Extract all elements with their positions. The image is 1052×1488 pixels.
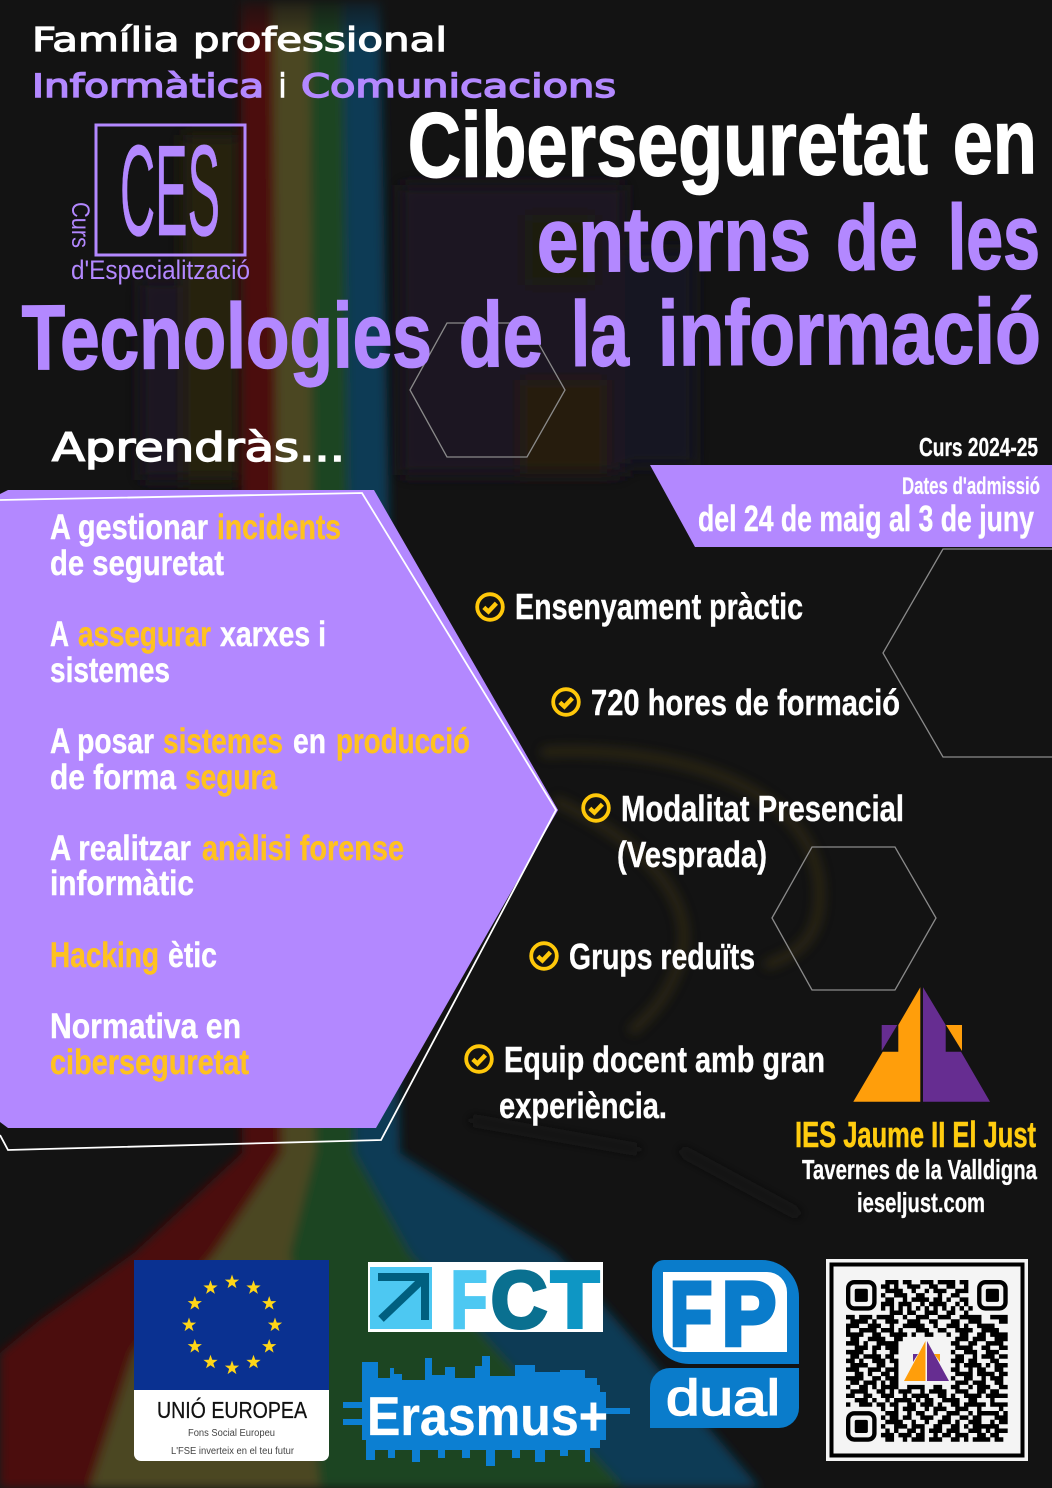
- outcome: xarxes: assegurar: [78, 615, 211, 654]
- outcome: producció: en: [293, 722, 326, 761]
- logo: European Union flag: Fons Social Europeu: [188, 1428, 275, 1439]
- outcome: producció: sistemes: [163, 722, 283, 761]
- title line 2: [536, 186, 1040, 292]
- feature: grups: [531, 936, 755, 977]
- outcome: forense: anàlisi forense: [202, 829, 404, 868]
- decorative hexagon outlines: [410, 323, 1052, 990]
- logo: FCT: T: [551, 1255, 599, 1344]
- heading: Família professional: Família professional: [32, 20, 447, 59]
- outcome: producció: de forma: [50, 758, 176, 797]
- main title: [21, 91, 1041, 389]
- outcome: producció: A posar: [50, 722, 154, 761]
- title line 1: Ciberseguretat: [407, 92, 928, 197]
- outcome: hacking: Hacking: [50, 936, 159, 975]
- title line 3: [21, 281, 1041, 389]
- logo: CES Curs d'Especialització: [66, 119, 250, 285]
- school name and address: [795, 1114, 1037, 1218]
- feature: modalitat: Modalitat Presencial: [621, 788, 904, 829]
- outcome: incidents: de seguretat: [50, 544, 224, 583]
- heading: Informàtica i Comunicacions: i: [279, 67, 286, 105]
- logo: FP dual: F: [670, 1265, 712, 1365]
- outcome: incidents: A gestionar: [50, 508, 208, 547]
- feature: equip docent: Equip docent amb gran: [504, 1039, 825, 1080]
- feature: hores: 720 hores de formació: [591, 682, 900, 723]
- QR code: [826, 1259, 1028, 1461]
- logo: FCT: C: [491, 1255, 547, 1344]
- outcome: xarxes: xarxes i: [220, 615, 326, 654]
- outcome: xarxes: sistemes: [50, 651, 170, 690]
- logo: FCT: F: [451, 1255, 487, 1344]
- outcome: forense: informàtic: [50, 864, 194, 903]
- outcome: xarxes: A: [50, 615, 69, 654]
- logo: IES Jaume II pyramid: [853, 987, 990, 1102]
- feature: ensenyament: Ensenyament pràctic: [515, 586, 803, 627]
- heading: Informàtica i Comunicacions: Informàtica: [32, 67, 264, 105]
- heading: Família professional: [32, 20, 616, 105]
- logo: European Union flag: UNIÓ EUROPEA: [157, 1397, 308, 1423]
- panel: learning outcomes: [0, 490, 558, 1150]
- logo: FP dual: [650, 1260, 799, 1428]
- title line 3: la: [570, 283, 630, 386]
- outcome: producció: producció: [336, 722, 470, 761]
- outcome: incidents: [50, 508, 341, 583]
- school name and address: ieseljust.com: [857, 1187, 985, 1218]
- outcome: forense: [50, 829, 404, 903]
- title line 3: de: [458, 284, 543, 386]
- outcome: incidents: incidents: [217, 508, 341, 547]
- title line 2: de: [835, 187, 918, 290]
- outcome: normativa: ciberseguretat: [50, 1043, 249, 1082]
- logo: European Union flag: L'FSE inverteix en el teu futur: [171, 1446, 295, 1457]
- outcome: forense: A realitzar: [50, 829, 191, 868]
- feature: equip docent: [466, 1039, 825, 1126]
- logo: CES Curs d'Especialització: d'Especialització: [71, 255, 250, 285]
- outcome: normativa: [50, 1007, 249, 1082]
- feature: equip docent: experiència.: [499, 1085, 667, 1126]
- logo: Erasmus+: [343, 1356, 630, 1466]
- outcome: producció: [50, 722, 470, 797]
- logo: FCT: [368, 1255, 603, 1344]
- title line 2: entorns: [536, 188, 811, 292]
- outcome: normativa: Normativa en: [50, 1007, 241, 1046]
- banner: admission dates: [650, 465, 1052, 547]
- feature: modalitat: [583, 788, 904, 875]
- heading: Aprendràs: Aprendràs...: [52, 426, 345, 471]
- text: CES: [120, 119, 220, 263]
- icon: pyramid in QR: [904, 1341, 949, 1381]
- outcome: producció: segura: [185, 758, 277, 797]
- logo: European Union flag: [134, 1260, 329, 1461]
- feature list: [466, 586, 904, 1126]
- outcome: hacking: ètic: [168, 936, 217, 975]
- logo: FP dual: P: [722, 1265, 776, 1365]
- feature: grups: Grups reduïts: [569, 936, 755, 977]
- logo: FP dual: dual: [666, 1370, 780, 1426]
- heading: Informàtica i Comunicacions: Comunicacions: [301, 67, 616, 105]
- heading: Informàtica i Comunicacions: [32, 67, 616, 105]
- title line 3: Tecnologies: [21, 285, 432, 389]
- logo: Erasmus+: Erasmus+: [367, 1385, 608, 1447]
- feature: modalitat: (Vesprada): [617, 834, 767, 875]
- outcome: xarxes: [50, 615, 326, 690]
- logo: CES Curs d'Especialització: Curs: [66, 202, 94, 248]
